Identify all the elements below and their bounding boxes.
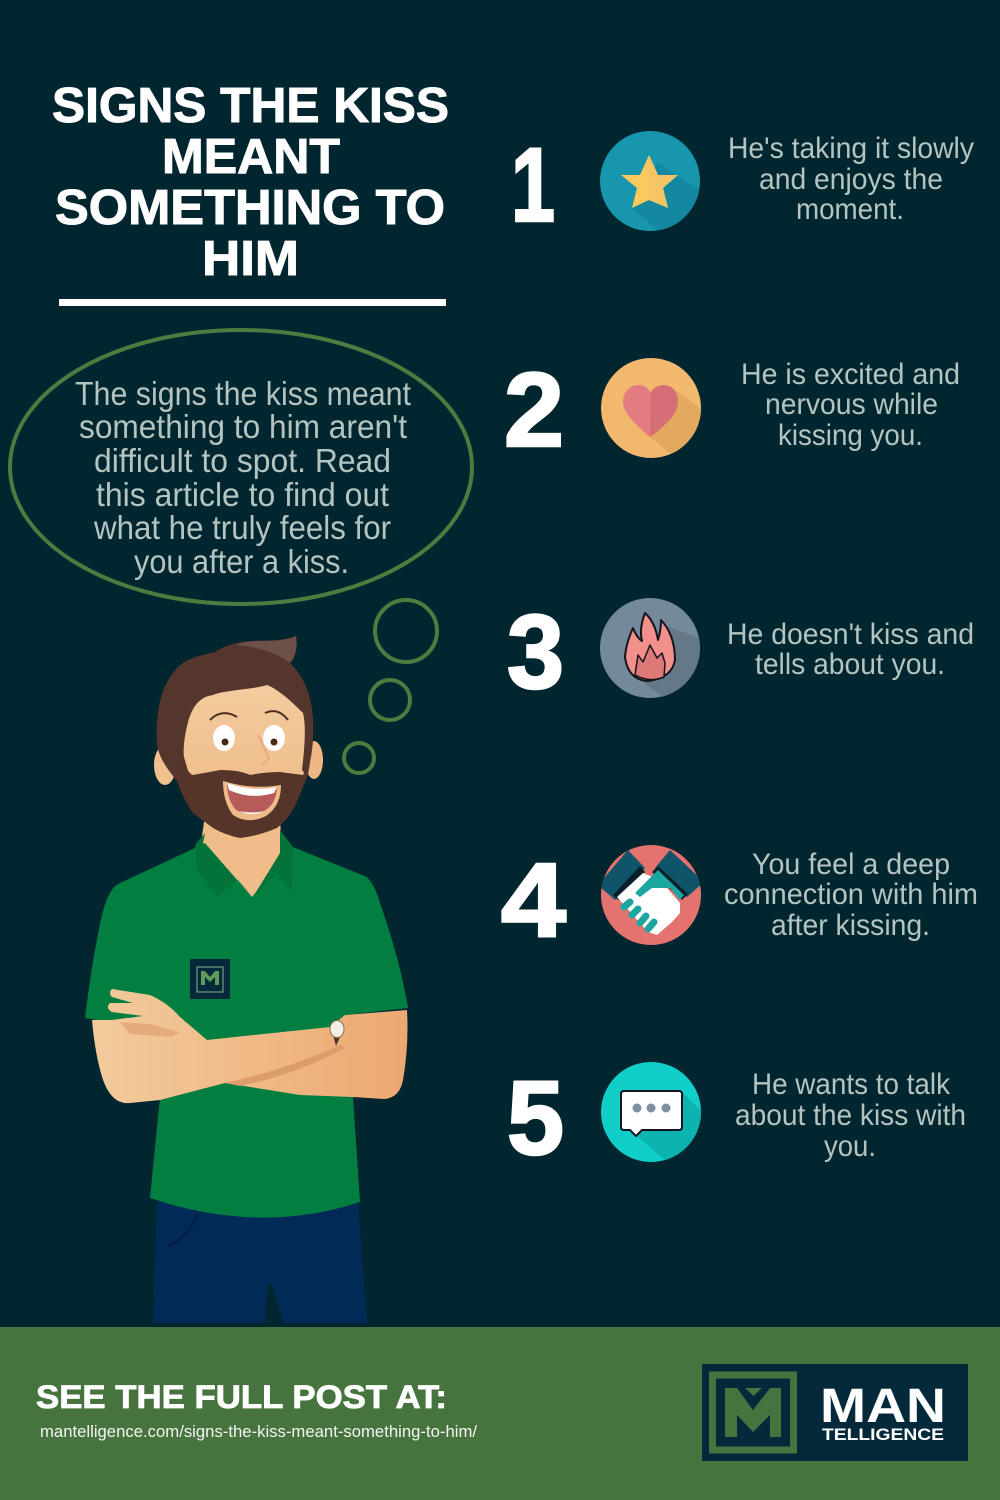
icon: flame xyxy=(600,598,705,700)
icon: heart xyxy=(601,358,701,458)
number 5: 5 xyxy=(507,1060,564,1177)
collar xyxy=(195,830,293,897)
number 3: 3 xyxy=(507,594,564,711)
logo xyxy=(702,1364,968,1461)
step 2 xyxy=(506,358,958,458)
bubble text: difficult to spot. Read xyxy=(94,442,391,479)
watch xyxy=(330,1020,344,1046)
text 2: nervous while xyxy=(765,388,938,421)
footer heading: SEE THE FULL POST AT: xyxy=(36,1379,447,1415)
text 2 xyxy=(741,358,960,452)
text 1 xyxy=(728,132,974,226)
face xyxy=(183,683,306,815)
bubble text xyxy=(75,375,411,580)
shirt xyxy=(85,843,408,1218)
text 4: after kissing. xyxy=(771,909,930,942)
text 3 xyxy=(727,618,974,681)
text 4: connection with him xyxy=(724,878,978,911)
icon: speech bubble xyxy=(601,1062,705,1165)
title: SIGNS THE KISS xyxy=(52,79,449,133)
footer band xyxy=(0,1327,1000,1500)
title: HIM xyxy=(202,232,299,286)
text 1: and enjoys the xyxy=(759,163,943,196)
footer url: mantelligence.com/signs-the-kiss-meant-something-to-him/ xyxy=(40,1422,477,1441)
arms xyxy=(92,989,408,1103)
beard xyxy=(172,760,310,838)
icon: handshake xyxy=(598,845,704,945)
shirt badge xyxy=(190,959,230,999)
pocket line xyxy=(167,1213,198,1247)
title: MEANT xyxy=(162,130,340,184)
text 5: He wants to talk xyxy=(752,1068,951,1101)
text 3: tells about you. xyxy=(755,648,945,681)
mouth xyxy=(223,781,281,820)
number 1: 1 xyxy=(511,127,555,244)
title xyxy=(52,79,449,286)
bubble text: this article to find out xyxy=(96,476,389,513)
bubble text: you after a kiss. xyxy=(134,543,349,580)
step 4 xyxy=(501,845,976,945)
text 1: moment. xyxy=(796,193,904,226)
text 1: He's taking it slowly xyxy=(728,132,974,165)
bubble text: what he truly feels for xyxy=(93,509,391,546)
number 4: 4 xyxy=(501,842,566,959)
text 4 xyxy=(724,848,978,942)
bubble text: something to him aren't xyxy=(79,408,407,445)
logo: MAN xyxy=(820,1380,946,1433)
hair xyxy=(157,636,313,782)
ears xyxy=(154,745,176,785)
eyes xyxy=(210,711,288,764)
finger shadow xyxy=(120,1022,180,1037)
illustration: bearded man with crossed arms xyxy=(85,636,408,1323)
thought bubble xyxy=(10,330,472,773)
arm shadow xyxy=(225,1045,345,1086)
title: SOMETHING TO xyxy=(55,181,445,235)
text 5: you. xyxy=(824,1130,876,1163)
step 1 xyxy=(515,131,974,231)
bubble text: The signs the kiss meant xyxy=(75,375,411,412)
text 2: kissing you. xyxy=(778,419,923,452)
step 5 xyxy=(508,1062,964,1162)
title underline xyxy=(59,299,446,306)
hair highlight xyxy=(236,636,297,663)
text 2: He is excited and xyxy=(741,358,960,391)
number 2: 2 xyxy=(504,352,564,469)
pants xyxy=(153,1196,367,1323)
logo: TELLIGENCE xyxy=(822,1425,944,1444)
text 4: You feel a deep xyxy=(752,848,950,881)
text 3: He doesn't kiss and xyxy=(727,618,974,651)
text 5 xyxy=(735,1068,966,1163)
neck xyxy=(200,815,282,900)
text 5: about the kiss with xyxy=(735,1099,966,1132)
step 3 xyxy=(508,598,972,698)
icon: star xyxy=(600,131,700,235)
